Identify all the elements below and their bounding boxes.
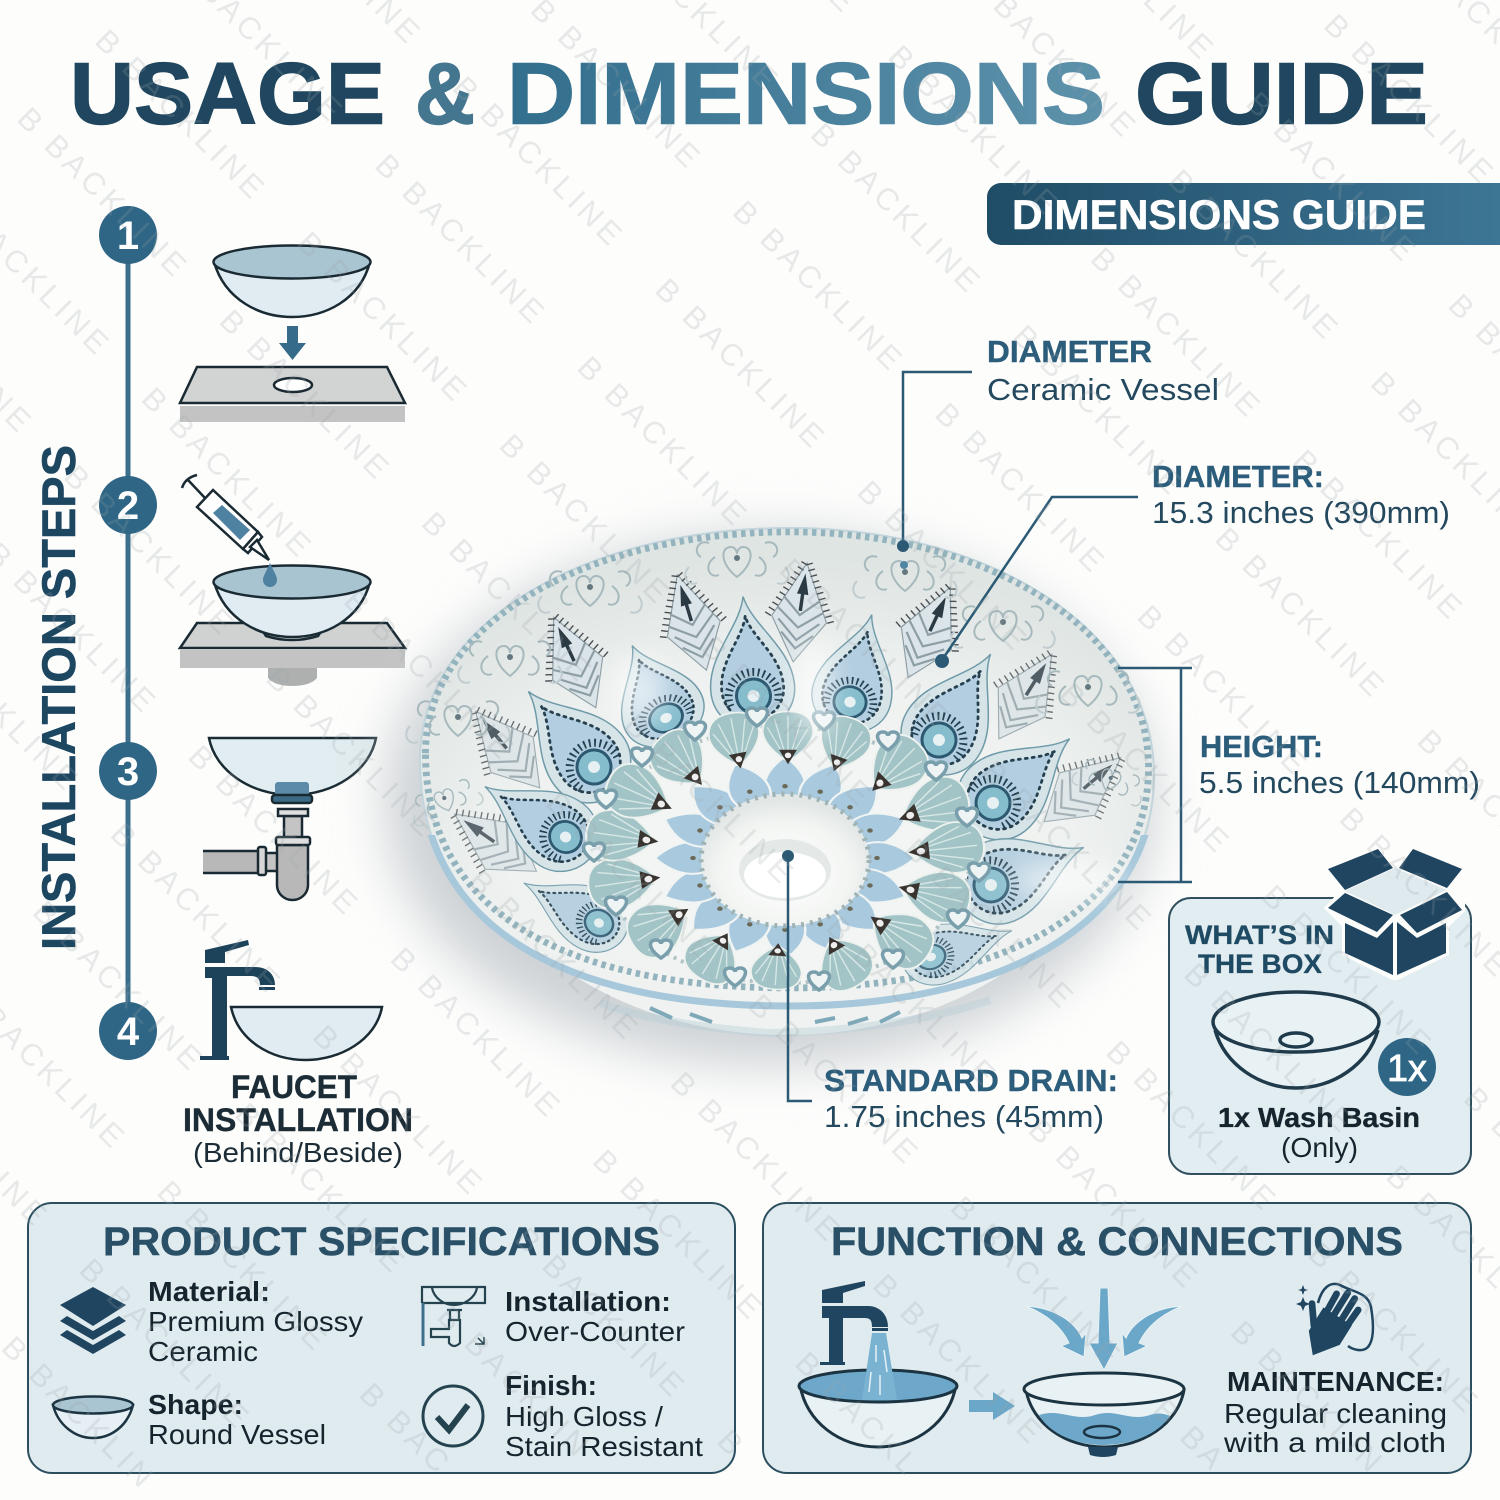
panel: function and connections: FUNCTION & CONNECTIONS xyxy=(831,1220,1403,1264)
icon: bowl with drain flow xyxy=(1024,1373,1184,1457)
callout: height measure: HEIGHT: xyxy=(1200,729,1323,764)
infographic canvas: B BACKLINE xyxy=(695,629,881,815)
infographic canvas: B BACKLINE xyxy=(1317,7,1500,193)
callout: diameter ceramic vessel: DIAMETER xyxy=(987,334,1152,369)
glare xyxy=(616,640,1125,898)
infographic canvas: B BACKLINE xyxy=(928,396,1114,582)
infographic canvas: B BACKLINE xyxy=(1177,956,1363,1142)
infographic canvas: B BACKLINE xyxy=(368,147,554,333)
infographic canvas: B BACKLIN xyxy=(431,1298,599,1466)
arrows: water flowing to drain xyxy=(1026,1288,1182,1370)
text: finish xyxy=(505,1370,703,1462)
infographic canvas: B BACKLINE xyxy=(228,1096,414,1282)
infographic canvas: B BACKLINE xyxy=(11,100,196,286)
text: shape: Round Vessel xyxy=(148,1419,326,1450)
infographic canvas: B BACKLINE xyxy=(897,832,1083,1017)
text: finish: Finish: xyxy=(505,1370,597,1401)
icon: step 1 bowl over counter xyxy=(180,246,405,422)
text: faucet installation: (Behind/Beside) xyxy=(193,1137,403,1168)
text: material: Premium Glossy xyxy=(148,1306,363,1337)
callout: standard drain: 1.75 inches (45mm) xyxy=(824,1099,1104,1134)
infographic canvas: B BACKLINE xyxy=(571,349,756,535)
text: material: Material: xyxy=(148,1276,270,1307)
infographic canvas: B BACKLINE xyxy=(1208,520,1394,706)
text: faucet installation xyxy=(183,1069,413,1168)
text: installation: Over-Counter xyxy=(505,1316,685,1347)
infographic canvas: B BACKLINE xyxy=(1084,240,1270,426)
infographic canvas: B BACKLINE xyxy=(135,380,321,566)
infographic canvas: B BACKLINE xyxy=(804,116,990,302)
infographic canvas: B BACKLINE xyxy=(384,940,570,1126)
title: USAGE xyxy=(70,46,385,142)
infographic canvas: B BACKLINE xyxy=(617,707,803,893)
text: faucet installation: INSTALLATION xyxy=(183,1102,413,1138)
infographic canvas: B BACKLINE xyxy=(306,1018,492,1204)
infographic canvas: B BACKLINE xyxy=(415,505,601,691)
infographic canvas: B BACKLINE xyxy=(260,660,445,846)
infographic canvas: B BACKLINE xyxy=(773,552,959,737)
callout: standard drain: STANDARD DRAIN: xyxy=(824,1063,1118,1098)
infographic canvas: B BACKLINE xyxy=(866,1267,1052,1453)
icon: basin outline xyxy=(1213,992,1379,1088)
panel: function and connections xyxy=(763,1203,1471,1473)
mandala feathers xyxy=(406,542,1148,899)
icon: installation diagram xyxy=(422,1287,485,1346)
infographic canvas: B BACKLINE xyxy=(1022,1112,1207,1297)
timeline: numbered steps: 1 xyxy=(117,214,139,258)
infographic canvas: B BACKLINE xyxy=(975,754,1161,939)
icon: check circle xyxy=(423,1386,483,1446)
text: shape: Shape: xyxy=(148,1389,243,1420)
drain hole xyxy=(701,794,869,926)
text: maintenance: Regular cleaning xyxy=(1224,1398,1447,1429)
icon: shape bowl xyxy=(53,1396,133,1438)
callout: height measure: 5.5 inches (140mm) xyxy=(1199,765,1480,800)
infographic canvas: B BACKLINE xyxy=(1006,318,1192,504)
infographic canvas: B BACKLINE xyxy=(508,1220,694,1406)
infographic canvas: B BACKLINE xyxy=(26,894,212,1079)
infographic canvas: B BACKLINE xyxy=(664,1065,850,1251)
banner: dimensions guide: DIMENSIONS GUIDE xyxy=(1012,191,1426,238)
text: maintenance: MAINTENANCE: xyxy=(1227,1366,1444,1397)
infographic canvas: B BACKLINE xyxy=(882,38,1067,224)
panel: what's in the box: THE BOX xyxy=(1198,949,1322,979)
infographic canvas: B BACKLINE xyxy=(462,863,647,1048)
infographic canvas: B BACKLIN xyxy=(0,1329,163,1497)
infographic canvas: B xyxy=(711,1423,753,1465)
icon: step 4 faucet and bowl xyxy=(200,940,382,1060)
text: finish: High Gloss / xyxy=(505,1401,663,1432)
infographic canvas: B BACKL xyxy=(788,1345,928,1485)
text: maintenance: with a mild cloth xyxy=(1223,1427,1446,1458)
infographic canvas: B BACKLINE xyxy=(726,194,912,379)
badge: 1x: 1x xyxy=(1387,1048,1427,1090)
mandala paisleys xyxy=(465,592,1099,994)
timeline: numbered steps: 2 xyxy=(117,484,139,528)
infographic canvas: B BACKLINE xyxy=(944,1189,1130,1375)
callout: diameter measure xyxy=(935,459,1450,668)
title: GUIDE xyxy=(1135,46,1428,142)
infographic canvas: B BACKLINE xyxy=(648,272,834,457)
basin underside xyxy=(462,549,1112,1035)
timeline: numbered steps xyxy=(99,206,157,1060)
callout: diameter ceramic vessel: Ceramic Vessel xyxy=(987,372,1219,407)
basin rim xyxy=(420,528,1154,1006)
text: maintenance xyxy=(1223,1366,1447,1458)
infographic canvas: B BACKLINE xyxy=(73,1252,259,1437)
infographic canvas: B BACKLINE xyxy=(151,1174,336,1360)
text: shape xyxy=(148,1389,326,1450)
arrow: flow right xyxy=(969,1392,1015,1420)
infographic canvas: B BACKLINE xyxy=(1255,878,1441,1064)
text: faucet installation: FAUCET xyxy=(231,1069,357,1105)
infographic canvas: B BACKLINE xyxy=(104,816,290,1002)
text: finish: Stain Resistant xyxy=(505,1431,703,1462)
infographic canvas: B BACKLINE xyxy=(182,738,367,924)
panel: product specifications xyxy=(28,1203,735,1473)
icon: hand with cloth xyxy=(1289,1280,1373,1363)
infographic canvas: B BACKLINE xyxy=(213,303,399,488)
infographic canvas: B BACKLINE xyxy=(1286,443,1472,628)
title: DIMENSIONS xyxy=(507,46,1105,142)
infographic canvas: B BACKLINE xyxy=(493,427,679,613)
panel: what's in the box: (Only) xyxy=(1281,1132,1358,1163)
heading: installation steps: INSTALLATION STEPS xyxy=(32,445,85,950)
mandala shell ring xyxy=(600,727,970,983)
banner: dimensions guide xyxy=(987,183,1500,245)
callout: diameter ceramic vessel xyxy=(897,334,1219,569)
icon: step 3 drain connection xyxy=(203,738,376,900)
icon: step 2 sealant and bowl xyxy=(180,475,405,686)
infographic canvas: B BA xyxy=(1146,1392,1234,1479)
infographic canvas: B BACKLINE xyxy=(1302,1236,1487,1422)
infographic canvas: B BACKLIN xyxy=(1224,1314,1392,1482)
callout: standard drain xyxy=(782,850,1118,1134)
infographic canvas: B BACKLINE xyxy=(1100,1034,1285,1219)
infographic canvas: B BACKLINE xyxy=(446,69,632,255)
badge: 1x xyxy=(1378,1038,1436,1096)
infographic canvas: B BACKLINE xyxy=(540,785,725,971)
infographic canvas: B BACKLINE xyxy=(1053,676,1239,862)
text: installation xyxy=(505,1286,685,1347)
callout: height measure xyxy=(1118,668,1480,882)
callout: diameter measure: DIAMETER: xyxy=(1152,459,1324,494)
icon: open box xyxy=(1328,849,1462,977)
infographic canvas: B BACKLINE xyxy=(1131,598,1316,784)
infographic canvas: B BACKLINE xyxy=(337,583,523,768)
text: material: Ceramic xyxy=(148,1336,258,1367)
timeline: numbered steps: 4 xyxy=(117,1010,140,1054)
infographic canvas: B BACKLINE xyxy=(586,1143,772,1328)
infographic canvas: B BACKLINE xyxy=(1162,163,1347,348)
icon: faucet filling bowl xyxy=(799,1281,957,1447)
infographic canvas: B BACKLINE xyxy=(820,909,1005,1095)
panel: what's in the box: 1x Wash Basin xyxy=(1218,1102,1420,1133)
photo: ceramic vessel basin xyxy=(385,528,1155,1065)
timeline: numbered steps: 3 xyxy=(117,750,139,794)
panel: product specifications: PRODUCT SPECIFICATIONS xyxy=(103,1220,660,1264)
mandala knots xyxy=(584,708,989,990)
title xyxy=(70,46,1428,142)
callout: diameter measure: 15.3 inches (390mm) xyxy=(1152,495,1450,530)
text: material xyxy=(148,1276,363,1367)
infographic canvas: B BACKLINE xyxy=(291,225,476,411)
panel: what's in the box: WHAT’S IN xyxy=(1185,920,1334,950)
icon: layers xyxy=(60,1287,126,1354)
infographic canvas: B BAC xyxy=(353,1376,459,1482)
infographic canvas: B BACKLINE xyxy=(742,987,927,1173)
infographic canvas: B BACKLINE xyxy=(88,23,274,208)
infographic canvas: B BACKLINE xyxy=(851,474,1036,659)
infographic canvas: B BACKLINE xyxy=(1240,85,1425,271)
text: installation: Installation: xyxy=(505,1286,671,1317)
panel: what's in the box xyxy=(1169,849,1471,1174)
infographic canvas: B BACKLINE xyxy=(57,458,243,644)
title: & xyxy=(415,46,475,142)
